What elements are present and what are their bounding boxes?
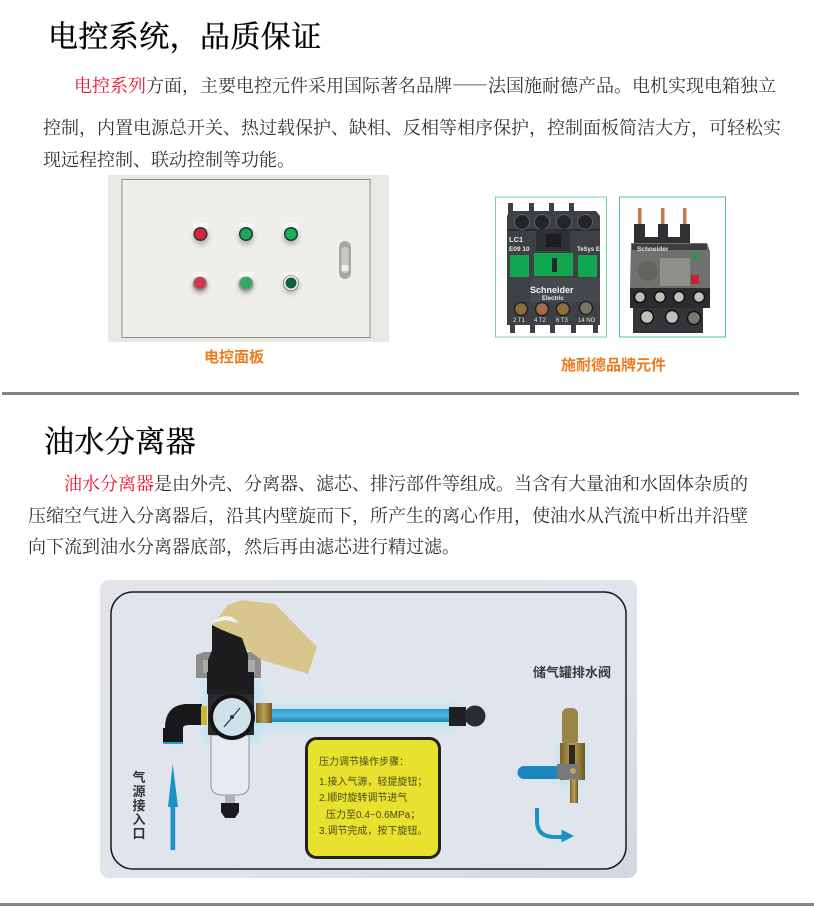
- caption: control panel: 电控面板: [204, 348, 264, 366]
- label: air inlet: 气: [132, 770, 146, 785]
- top terminals: [514, 214, 592, 230]
- icon: red push button: [192, 272, 208, 294]
- brand labels: 4 T2: [534, 318, 547, 324]
- text block: electrical control description: [43, 72, 781, 172]
- brand labels: Electric: [542, 296, 564, 302]
- prongs: [508, 203, 598, 333]
- text block: electrical control description: 电控系列方面，主要电控元件采用国际著名品牌——法国施耐德产品。电机实现电箱独立: [74, 72, 776, 98]
- text block: separator description: 油水分离器是由外壳、分离器、滤芯、排污部件等组成。当含有大量油和水固体杂质的: [64, 470, 748, 496]
- label: air inlet: 口: [132, 826, 146, 841]
- callout: pressure adjustment steps: 压力调节操作步骤：: [319, 755, 409, 768]
- brand labels: LC1: [509, 235, 523, 244]
- label: air inlet: 接: [132, 798, 146, 813]
- knob: [208, 625, 248, 672]
- relay terminals: [634, 292, 704, 324]
- text block: electrical control description: 控制，内置电源总开关、热过载保护、缺相、反相等相序保护，控制面板简洁大方，可轻松实: [43, 114, 781, 140]
- callout: pressure adjustment steps: [306, 738, 440, 858]
- brass connector: [256, 703, 272, 723]
- text block: electrical control description: 现远程控制、联动控制等功能。: [43, 146, 295, 172]
- label: air inlet: 入: [132, 812, 146, 827]
- caption: Schneider components: 施耐德品牌元件: [561, 356, 666, 374]
- icon: blue air hose: [272, 706, 486, 726]
- icon: green push button: [238, 272, 254, 294]
- callout: pressure adjustment steps: 3.调节完成，按下旋钮。: [319, 824, 427, 837]
- heading: oil water separator: 油水分离器: [44, 417, 196, 461]
- mounting bracket: [196, 652, 261, 678]
- icon: red indicator light: [193, 223, 209, 245]
- icon: green indicator light 2: [283, 223, 299, 245]
- divider: [0, 903, 814, 906]
- regulator body: [207, 672, 254, 694]
- hand: [212, 600, 317, 674]
- icon: door handle: [339, 241, 351, 279]
- icon: drain valve: [518, 708, 585, 803]
- icon: green indicator light 1: [238, 223, 254, 245]
- callout: pressure adjustment steps: 压力至0.4~0.6MPa；: [326, 808, 420, 821]
- bottom terminals: [514, 302, 592, 316]
- callout: pressure adjustment steps: 1.接入气源，轻提旋钮；: [319, 775, 427, 788]
- divider: [2, 392, 799, 395]
- brand labels: Schneider: [530, 285, 574, 295]
- arrow: drain direction: [537, 808, 574, 842]
- icon: air filter regulator: [163, 600, 317, 818]
- brand labels: E09 10: [509, 246, 530, 253]
- drain: [225, 795, 235, 804]
- panel: Schneider contactor: [496, 197, 606, 337]
- panel: Schneider thermal relay: [620, 197, 726, 337]
- brand labels: [509, 235, 600, 324]
- text block: separator description: [28, 470, 748, 559]
- text block: separator description: 压缩空气进入分离器后，沿其内壁旋而下，所产生的离心作用，使油水从汽流中析出并沿壁: [28, 502, 748, 528]
- pressure gauge: [209, 694, 255, 740]
- brand labels: 6 T3: [556, 318, 569, 324]
- elbow fitting: [163, 704, 202, 743]
- text block: separator description: 向下流到油水分离器底部，然后再由滤芯进行精过滤。: [28, 533, 460, 559]
- panel: Schneider thermal relay: Schneider: [637, 246, 669, 253]
- arrow: air inlet up: [168, 764, 178, 850]
- green windows: [510, 253, 597, 277]
- blue glow behind regulator: [204, 680, 586, 785]
- heading: electrical control: 电控系统，品质保证: [48, 12, 322, 56]
- label: tank drain valve: 储气罐排水阀: [533, 665, 611, 680]
- label: air inlet: 源: [132, 784, 146, 799]
- brand labels: TeSys E: [577, 247, 600, 253]
- brand labels: 14 NO: [578, 318, 596, 324]
- callout: pressure adjustment steps: 2.顺时旋转调节进气: [319, 791, 407, 804]
- panel: separator instruction plate: [100, 580, 637, 878]
- bowl: [211, 735, 249, 795]
- icon: selector switch: [283, 272, 299, 294]
- label: air inlet: [132, 770, 146, 841]
- panel: control cabinet photo: [108, 175, 389, 342]
- brand labels: 2 T1: [513, 318, 526, 324]
